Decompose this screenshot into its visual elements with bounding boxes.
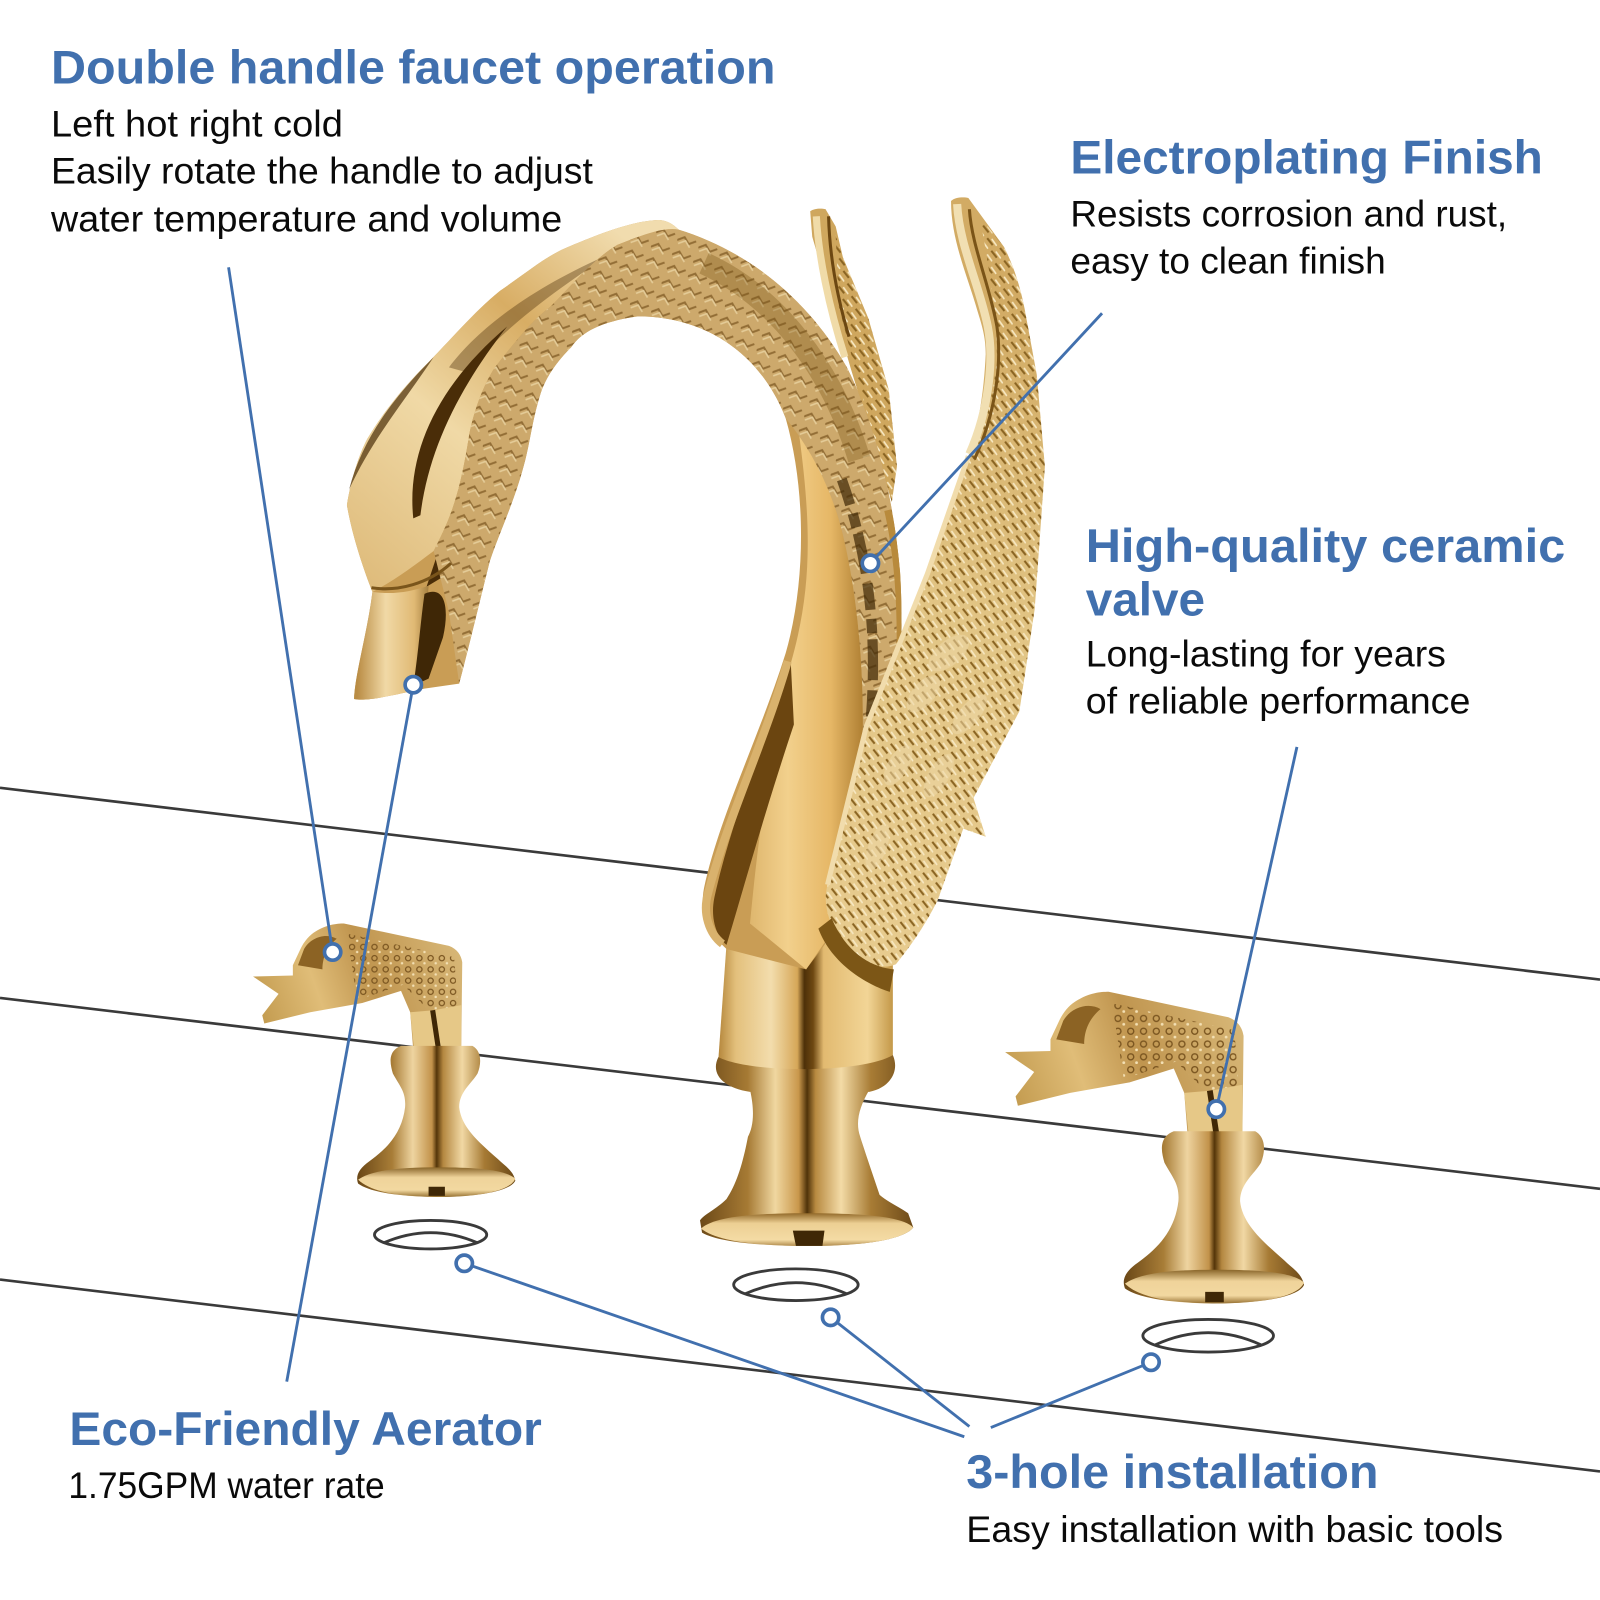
text block: double handle faucet operation: Easily rotate the handle to adjust <box>51 151 593 192</box>
wing root <box>818 918 894 992</box>
text block: ceramic valve <box>1086 520 1565 721</box>
right handle <box>1005 992 1304 1303</box>
text block: double handle faucet operation: Double handle faucet operation <box>51 42 776 94</box>
stem stripe <box>433 1010 439 1051</box>
countertop outlines <box>0 788 1600 1471</box>
hole: left <box>374 1220 487 1249</box>
stem stripe <box>1210 1091 1217 1137</box>
text block: 3-hole installation <box>966 1446 1503 1550</box>
handle body <box>253 923 462 1050</box>
text block: ceramic valve: of reliable performance <box>1086 680 1470 721</box>
callout leader: ceramic valve <box>1208 747 1297 1117</box>
head dark reflections <box>349 253 612 587</box>
callout leader: electroplating <box>862 313 1102 571</box>
spout base <box>700 1090 913 1246</box>
back wing <box>810 209 897 502</box>
text block: electroplating finish <box>1070 131 1543 281</box>
text block: ceramic valve: valve <box>1086 573 1205 625</box>
textured neck band <box>434 229 902 731</box>
text block: double handle faucet operation: water temperature and volume <box>50 199 562 240</box>
hole: center <box>734 1269 858 1301</box>
fin textured edge <box>706 661 788 944</box>
wing feather clusters <box>861 628 993 873</box>
swan spout faucet <box>347 197 1045 1246</box>
handle stem <box>1184 1085 1242 1137</box>
handle body <box>1005 992 1244 1136</box>
callout leader: aerator <box>287 677 421 1382</box>
mounting holes <box>374 1220 1273 1352</box>
dark fin <box>713 663 794 945</box>
text block: 3-hole installation: Easy installation with basic tools <box>966 1509 1503 1550</box>
handle engraving <box>347 934 459 1020</box>
handle base <box>1124 1131 1304 1303</box>
handle stem <box>410 1005 461 1051</box>
text block: ceramic valve: High-quality ceramic <box>1086 520 1565 572</box>
text block: eco-friendly aerator: 1.75GPM water rate <box>68 1465 385 1506</box>
text block: ceramic valve: Long-lasting for years <box>1086 633 1446 674</box>
handle head reflection <box>298 936 337 969</box>
handle engraving <box>1112 1003 1240 1102</box>
text block: electroplating finish: Resists corrosion and rust, <box>1070 194 1507 235</box>
smooth head highlight <box>347 220 679 592</box>
polished body <box>750 434 863 969</box>
handle head reflection <box>1056 1006 1100 1044</box>
spout cylinder <box>718 944 893 1070</box>
left handle <box>253 923 515 1197</box>
collar <box>716 1055 895 1092</box>
handle base <box>357 1046 515 1197</box>
spout neck and head <box>347 220 902 969</box>
callout leader: double handle <box>229 267 341 960</box>
text block: double handle faucet operation: Left hot right cold <box>51 104 343 145</box>
text block: eco-friendly aerator: Eco-Friendly Aerator <box>69 1403 542 1455</box>
text block: 3-hole installation: 3-hole installation <box>966 1446 1379 1498</box>
beak <box>354 563 451 700</box>
hole: right <box>1143 1319 1273 1352</box>
front wing <box>826 197 1045 967</box>
text block: electroplating finish: Electroplating Finish <box>1070 131 1543 183</box>
text block: eco-friendly aerator <box>68 1403 542 1506</box>
text block: electroplating finish: easy to clean finish <box>1070 240 1386 281</box>
callout leaders: three holes <box>456 1255 1159 1437</box>
text block: double handle faucet operation <box>50 42 776 240</box>
